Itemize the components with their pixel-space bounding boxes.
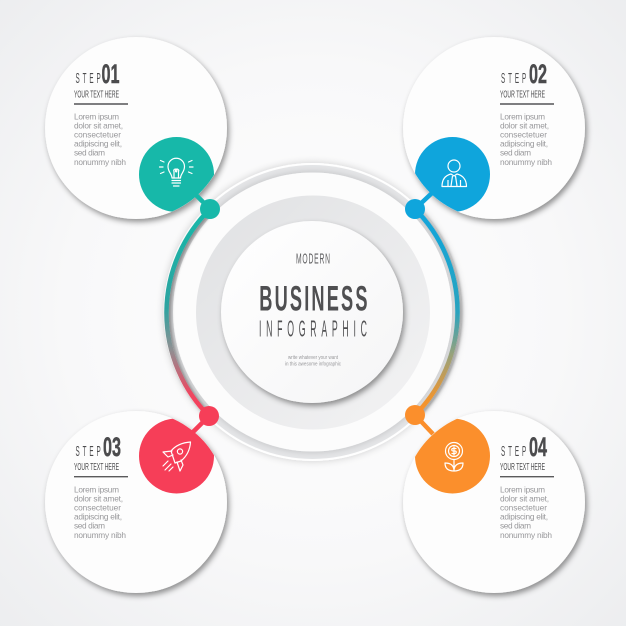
text: step 04 body: sed diam <box>500 521 531 531</box>
heading: step 01 <box>74 59 120 100</box>
text: step 02 body: sed diam <box>500 148 531 158</box>
text: step 03 body: Lorem ipsum <box>74 484 119 494</box>
heading: step 03: STEP <box>76 444 101 460</box>
heading: step 02: STEP <box>501 71 526 87</box>
heading: step 04: STEP <box>501 444 526 460</box>
text: step 01 body: dolor sit amet, <box>74 120 123 130</box>
text: step 02 body: adipiscing elit, <box>500 139 548 149</box>
heading: step 04: 04 <box>529 432 547 462</box>
text: small caption <box>285 355 341 368</box>
middle grey ring <box>196 196 430 430</box>
heading: step 02 <box>500 59 547 100</box>
heading: step 03: YOUR TEXT HERE <box>74 461 119 473</box>
text: step 01 body: nonummy nibh <box>74 157 126 167</box>
text: step 04 body: Lorem ipsum <box>500 484 545 494</box>
heading: step 04 <box>500 432 547 473</box>
badge 01 <box>139 137 214 212</box>
text: step 03 body: dolor sit amet, <box>74 493 123 503</box>
connector arc: blue to orange <box>415 209 458 415</box>
outer ring <box>164 163 462 461</box>
connector and node 02 <box>405 193 432 219</box>
panel: step 04 <box>403 405 585 593</box>
subtitle: infographic: INFOGRAPHIC <box>259 316 367 342</box>
connector arc: teal to red <box>166 209 210 416</box>
text: step 04 body <box>500 484 552 540</box>
text: step 04 body: nonummy nibh <box>500 530 552 540</box>
panel: step 03 <box>45 406 227 593</box>
panel: centre disc <box>221 221 403 403</box>
text: step 04 body: consectetuer <box>500 502 547 512</box>
badge 02 <box>415 137 490 212</box>
connector and node 03 <box>193 406 219 432</box>
text: step 03 body: nonummy nibh <box>74 530 126 540</box>
text: step 01 body: consectetuer <box>74 130 121 140</box>
connector and node 01 <box>196 195 220 219</box>
heading: step 01: 01 <box>102 59 120 89</box>
text: step 02 body: Lorem ipsum <box>500 111 545 121</box>
heading: step 04: YOUR TEXT HERE <box>500 461 545 473</box>
text: step 03 body: consectetuer <box>74 502 121 512</box>
heading: step 01: YOUR TEXT HERE <box>74 88 119 100</box>
title: business: BUSINESS <box>259 279 367 318</box>
panel: step 02 <box>403 37 585 219</box>
text: step 01 body: sed diam <box>74 148 105 158</box>
badge 03 <box>139 418 214 494</box>
text: step 01 body <box>74 111 126 167</box>
text: step 01 body: Lorem ipsum <box>74 111 119 121</box>
heading: step 01: STEP <box>76 71 101 87</box>
panel: step 01 <box>45 37 227 219</box>
heading: step 03 <box>74 432 121 473</box>
icon: light bulb <box>160 158 193 186</box>
text: small caption: in this awesome infographic <box>285 362 341 368</box>
icon: rocket <box>163 442 190 471</box>
text: step 04 body: dolor sit amet, <box>500 493 549 503</box>
heading: step 02: YOUR TEXT HERE <box>500 88 545 100</box>
text: small caption: write whatever your want <box>287 355 338 361</box>
text: step 03 body <box>74 484 126 540</box>
text: step 02 body: dolor sit amet, <box>500 120 549 130</box>
heading: step 03: 03 <box>103 432 121 462</box>
text: step 02 body <box>500 111 552 167</box>
text: step 04 body: adipiscing elit, <box>500 512 548 522</box>
text: step 03 body: sed diam <box>74 521 105 531</box>
text: step 03 body: adipiscing elit, <box>74 512 122 522</box>
text: step 01 body: adipiscing elit, <box>74 139 122 149</box>
heading: step 02: 02 <box>529 59 547 89</box>
text: step 02 body: nonummy nibh <box>500 157 552 167</box>
badge 04 <box>415 418 490 494</box>
connector and node 04 <box>405 405 433 434</box>
text: step 02 body: consectetuer <box>500 130 547 140</box>
icon: money plant <box>445 442 463 471</box>
heading: modern: MODERN <box>296 252 330 267</box>
icon: businessman <box>442 160 466 186</box>
